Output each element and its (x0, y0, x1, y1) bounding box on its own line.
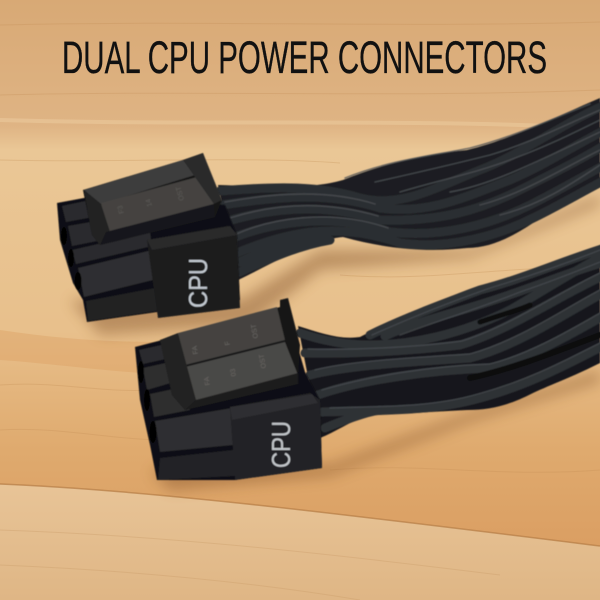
contact shadows (70, 195, 600, 490)
latch: FA (192, 345, 200, 355)
CPU label: CPU (183, 258, 213, 308)
latch: OST (250, 323, 260, 339)
lower cable bundle (298, 245, 600, 438)
lower connector (135, 298, 322, 480)
top cable bundle (218, 98, 600, 280)
latch: OST (175, 185, 186, 201)
latch (83, 153, 222, 245)
CPU block (230, 393, 322, 480)
latch: 14 (145, 198, 154, 207)
CPU block (147, 226, 240, 318)
latch: F (224, 340, 232, 346)
pin housing (135, 320, 322, 480)
latch: 03 (230, 368, 238, 377)
pin housing (57, 195, 240, 322)
latch: F3 (117, 204, 126, 214)
top connector (57, 153, 240, 322)
CPU label: CPU (266, 421, 296, 468)
latch: FA (204, 376, 212, 386)
latch (160, 298, 300, 410)
latch: OST (258, 353, 268, 369)
